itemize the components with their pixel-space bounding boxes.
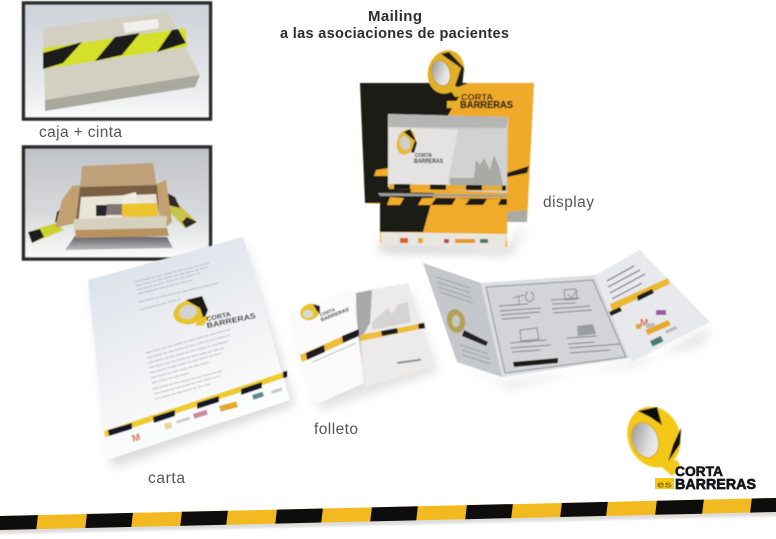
brochure logo (394, 127, 444, 165)
brochure stripe (389, 184, 506, 191)
yellow tape (43, 28, 187, 69)
left panel logo (444, 307, 468, 335)
triptico middle panel (481, 275, 630, 377)
display logo text: BARRERAS (460, 100, 513, 111)
front box stripes (380, 197, 507, 205)
tape roll (618, 399, 690, 476)
title: Mailing (368, 8, 422, 25)
folleto (290, 283, 438, 410)
front box logo strip (381, 232, 507, 247)
logo wordmark (655, 464, 756, 493)
carta logo: CORTA (206, 311, 232, 323)
back flap (80, 163, 157, 190)
carta logo (170, 296, 257, 330)
display logo text (447, 92, 513, 111)
label: caja + cinta: caja + cinta (39, 124, 122, 141)
brochure logo: CORTA (415, 153, 432, 159)
folleto fold shadow (356, 290, 372, 384)
folleto skyline (372, 302, 411, 330)
folleto logo: CORTA (319, 307, 336, 318)
right panel logos: M (640, 318, 648, 329)
tape shadow (0, 511, 776, 533)
folleto logo: BARRERAS (320, 306, 351, 324)
triptico shadow (460, 326, 712, 388)
triptico right panel (595, 250, 710, 362)
folleto front panel (290, 287, 364, 405)
side flaps (55, 185, 81, 228)
photo: opened box (24, 147, 210, 259)
box shadow (65, 236, 173, 250)
right panel heading lines (607, 266, 645, 299)
folleto back panel (357, 283, 433, 387)
box top (43, 12, 200, 100)
label: folleto: folleto (314, 421, 358, 438)
front wall (74, 216, 167, 230)
triptico left panel (423, 263, 502, 377)
skyline (450, 155, 503, 186)
display logo text: CORTA (461, 92, 493, 102)
display front box (380, 192, 507, 247)
photo: closed box with tape (24, 3, 210, 119)
folleto back stripe (360, 323, 425, 341)
logo wordmark: es (657, 480, 672, 490)
folleto shadow (295, 290, 438, 410)
title (280, 8, 509, 42)
carta logo: BARRERAS (206, 311, 257, 330)
label: carta: carta (148, 470, 185, 487)
back panel (360, 83, 534, 222)
logo wordmark: BARRERAS (675, 476, 756, 493)
middle panel text (499, 298, 620, 353)
right panel stripe (610, 278, 670, 311)
folleto logo (298, 301, 351, 324)
carta stripe (104, 371, 287, 437)
shipping label (123, 19, 159, 33)
tape roll on display (422, 46, 470, 98)
carta sheet (88, 237, 290, 460)
novartis mark (397, 359, 421, 364)
display shadow (378, 222, 528, 254)
left panel text (436, 277, 491, 364)
display inner brochure (388, 114, 508, 193)
yellow tape left (28, 223, 64, 243)
brochure logo: BARRERAS (414, 158, 444, 165)
carta shadow (92, 245, 295, 468)
carta footer logos: M (131, 432, 142, 445)
yellow tape right (165, 193, 197, 228)
folleto front stripe (300, 329, 359, 362)
box side (45, 75, 200, 111)
display (360, 46, 534, 254)
middle panel icons (513, 289, 577, 342)
carta body text lines (135, 263, 231, 399)
back panel stripes (507, 166, 529, 177)
logo wordmark: CORTA (675, 464, 723, 479)
main logo: Corta Barreras (618, 399, 756, 493)
bottom hazard tape (0, 497, 776, 533)
title: a las asociaciones de pacientes (280, 26, 509, 42)
label: display: display (543, 194, 594, 211)
middle panel black bar (513, 358, 558, 367)
box interior (75, 185, 160, 228)
carta (88, 237, 295, 468)
triptico (423, 250, 712, 388)
contents (122, 203, 158, 217)
icon: card (577, 324, 596, 336)
